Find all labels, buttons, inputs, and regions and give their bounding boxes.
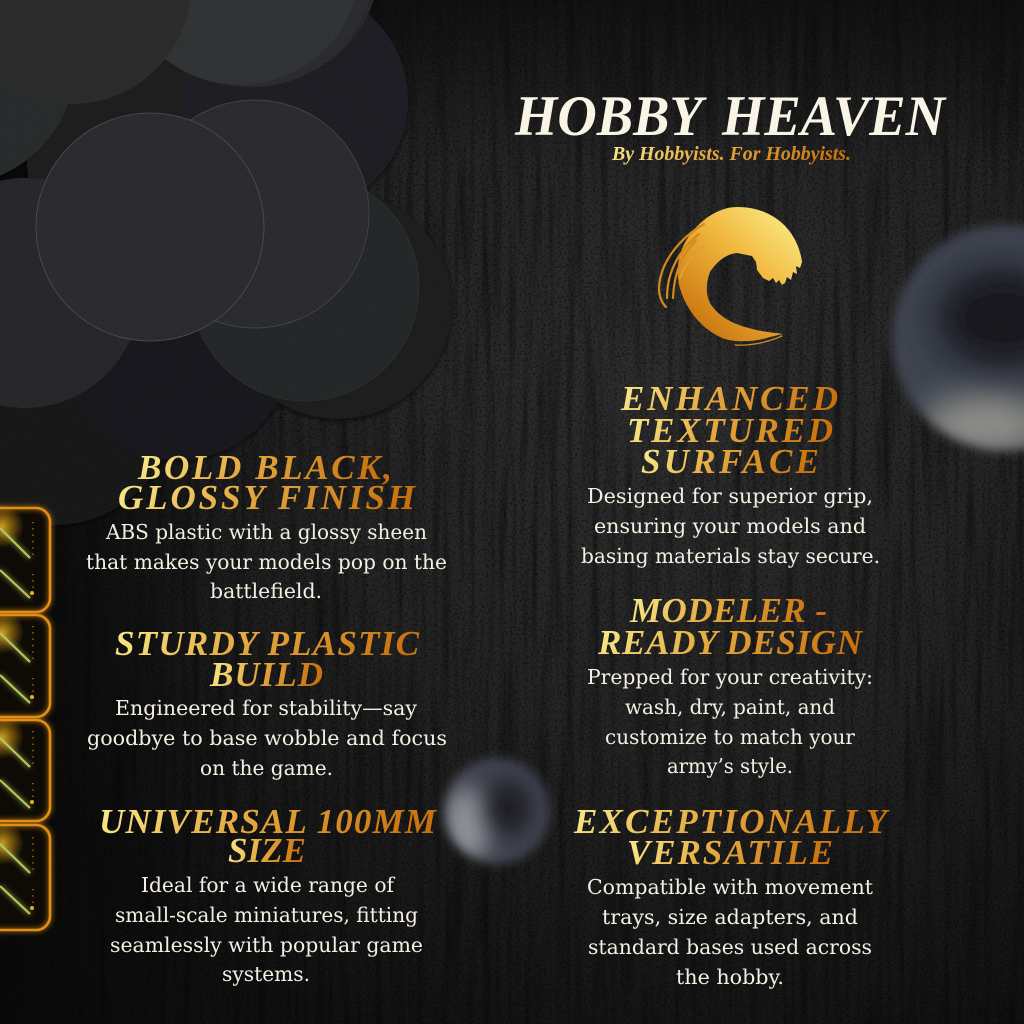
feature: textured surface [581,379,880,568]
feature: versatile [573,802,891,989]
feature: universal size: SIZE [228,831,306,870]
feature: textured surface: SURFACE [641,442,819,481]
blurred sphere right [892,225,1024,455]
feature: textured surface: Designed for superior grip, [587,484,873,508]
title: HOBBY HEAVEN [514,85,947,148]
feature: modeler-ready: MODELER - [629,591,827,630]
feature: sturdy build [87,624,447,780]
icon: gold brush circle logo [659,207,802,345]
feature: textured surface: ensuring your models and [594,514,866,538]
feature: versatile: standard bases used across [588,935,872,959]
feature: universal size: systems. [222,962,310,986]
feature: textured surface: TEXTURED [627,411,833,450]
blurred sphere bottom [444,758,550,864]
feature: modeler-ready: READY DESIGN [597,623,864,662]
feature: versatile: Compatible with movement [587,875,874,899]
neon icon panels [0,504,50,930]
feature: versatile: EXCEPTIONALLY [573,802,891,841]
feature: modeler-ready [587,591,873,778]
neon panel 1 [0,504,50,612]
feature: sturdy build: STURDY PLASTIC [115,624,420,663]
feature: sturdy build: Engineered for stability—say [115,696,417,720]
feature: versatile: VERSATILE [627,833,833,872]
feature: universal size: small-scale miniatures, fitting [115,903,418,927]
feature: glossy finish: battlefield. [210,579,322,603]
subtitle: By Hobbyists. For Hobbyists. [611,144,851,165]
feature: glossy finish: ABS plastic with a glossy sheen [105,520,427,544]
left column features [86,448,447,986]
feature: modeler-ready: wash, dry, paint, and [625,695,835,719]
feature: glossy finish [86,448,447,603]
feature: textured surface: ENHANCED [620,379,838,418]
feature: sturdy build: BUILD [209,655,323,694]
neon panel 2 [0,610,50,717]
feature: glossy finish: BOLD BLACK, [137,448,392,487]
feature: universal size [99,802,438,986]
neon panel 4 [0,821,50,930]
feature: textured surface: basing materials stay secure. [581,544,880,568]
feature: modeler-ready: customize to match your [605,725,855,749]
right column features [573,379,891,989]
feature: glossy finish: GLOSSY FINISH [118,478,417,517]
feature: modeler-ready: Prepped for your creativity: [587,665,873,689]
feature: glossy finish: that makes your models pop on the [86,550,447,574]
feature: sturdy build: on the game. [200,756,333,780]
feature: universal size: UNIVERSAL 100MM [99,802,438,841]
feature: universal size: Ideal for a wide range of [141,873,395,897]
stack of black round bases [0,0,452,548]
feature: sturdy build: goodbye to base wobble and focus [87,726,447,750]
feature: modeler-ready: army’s style. [667,754,793,778]
neon panel 3 [0,715,50,821]
feature: versatile: the hobby. [676,965,784,989]
feature: versatile: trays, size adapters, and [602,905,858,929]
feature: universal size: seamlessly with popular game [110,933,423,957]
